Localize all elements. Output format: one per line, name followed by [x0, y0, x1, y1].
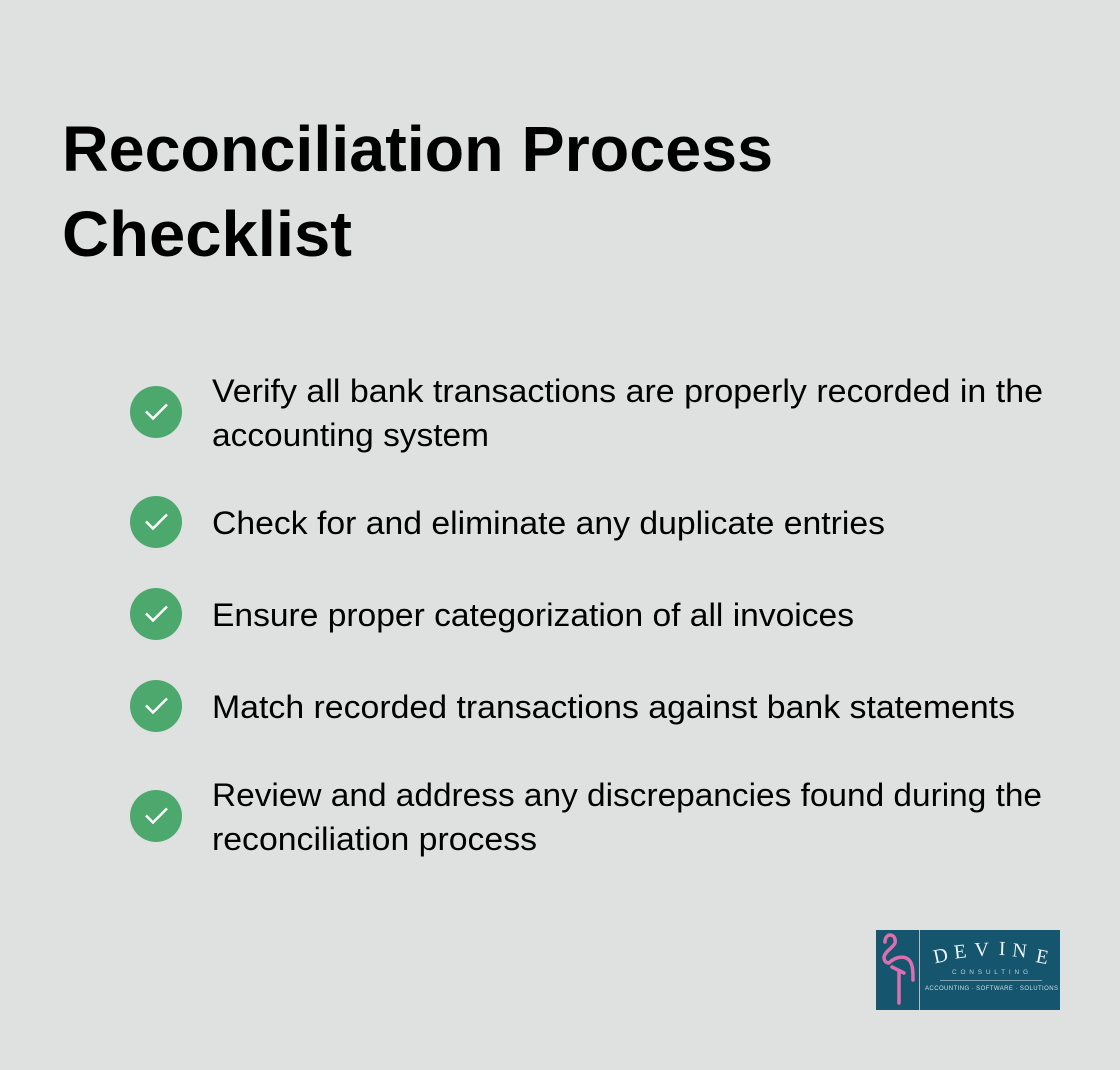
- item 5: Review and address any discrepancies found during the: [212, 777, 1042, 813]
- wordmark: E: [1034, 945, 1050, 969]
- logo: Devine Consulting: [876, 930, 1060, 1010]
- item 5: [130, 777, 1042, 857]
- wordmark: [925, 938, 1058, 992]
- title: Reconciliation Process: [62, 113, 773, 185]
- item 4: [130, 680, 1015, 732]
- item 2: Check for and eliminate any duplicate entries: [212, 505, 885, 541]
- wordmark: E: [953, 940, 968, 964]
- item 5: reconciliation process: [212, 821, 537, 857]
- checklist: [130, 373, 1043, 857]
- title: [62, 113, 773, 270]
- title: Checklist: [62, 198, 352, 270]
- wordmark: D: [931, 944, 950, 968]
- wordmark: N: [1011, 939, 1028, 963]
- item 1: Verify all bank transactions are properly recorded in the: [212, 373, 1043, 409]
- item 4: Match recorded transactions against bank statements: [212, 689, 1015, 725]
- item 1: accounting system: [212, 417, 489, 453]
- wordmark: CONSULTING: [952, 969, 1028, 976]
- item 1: [130, 373, 1043, 453]
- item 3: [130, 588, 854, 640]
- wordmark: V: [974, 939, 990, 961]
- wordmark: I: [998, 938, 1006, 960]
- wordmark: ACCOUNTING · SOFTWARE · SOLUTIONS: [925, 986, 1058, 992]
- icon: flamingo: [884, 935, 913, 1003]
- item 3: Ensure proper categorization of all invoices: [212, 597, 854, 633]
- item 2: [130, 496, 885, 548]
